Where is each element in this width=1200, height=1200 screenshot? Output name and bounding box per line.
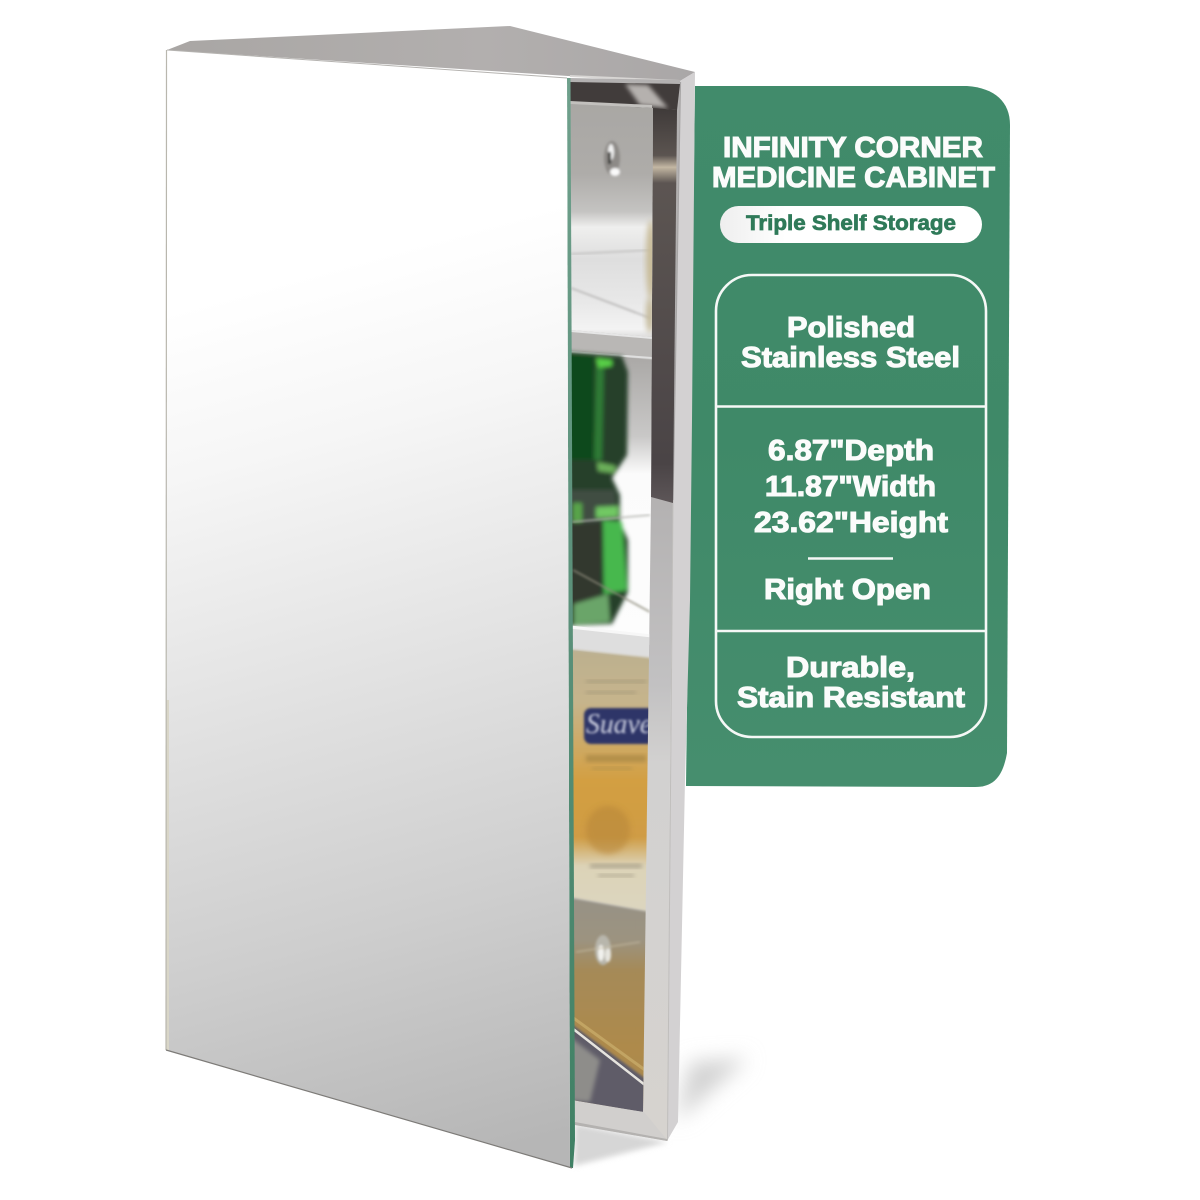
green bottle <box>566 352 650 626</box>
lotion bottle <box>572 648 649 910</box>
title <box>712 132 995 194</box>
lower shelf <box>574 1024 644 1112</box>
material text: Polished <box>787 312 915 344</box>
durability text: Durable, <box>786 652 915 684</box>
bottom lip <box>574 1101 668 1141</box>
lower reflection <box>574 897 646 1108</box>
durability text: Stain Resistant <box>737 682 965 714</box>
panel background <box>686 86 1010 787</box>
green info panel <box>686 86 1010 787</box>
durability text <box>737 652 965 714</box>
floor shadow <box>574 1058 748 1166</box>
suave label: Suave <box>586 708 652 740</box>
title: INFINITY CORNER <box>723 132 983 164</box>
mirror door <box>166 50 575 1168</box>
upper inner lip <box>570 82 680 110</box>
frame side edge <box>667 72 695 1141</box>
title: MEDICINE CABINET <box>712 162 995 194</box>
subtitle pill: Triple Shelf Storage <box>746 212 956 235</box>
dimensions text <box>754 435 948 539</box>
glass edge <box>567 78 575 1168</box>
mirror face <box>166 50 570 1167</box>
door direction text: Right Open <box>764 574 931 606</box>
dimensions text: 6.87"Depth <box>768 435 934 467</box>
mounting keyhole top <box>604 141 620 176</box>
dark inner return strip <box>651 108 677 503</box>
material text: Stainless Steel <box>741 342 960 374</box>
dimensions text: 11.87"Width <box>765 471 936 503</box>
frame front face <box>570 78 681 1141</box>
middle shelf <box>572 629 649 659</box>
mounting keyhole bottom <box>595 935 611 965</box>
back wall reflection <box>570 104 653 645</box>
reflected objects <box>646 220 656 333</box>
upper shelf <box>571 330 652 360</box>
subtitle pill <box>720 206 982 243</box>
cabinet body <box>167 26 695 1141</box>
cabinet top face <box>167 26 695 81</box>
cabinet interior <box>570 104 653 1112</box>
feature box <box>716 275 986 737</box>
dimensions text: 23.62"Height <box>754 507 948 539</box>
material text <box>741 312 960 374</box>
